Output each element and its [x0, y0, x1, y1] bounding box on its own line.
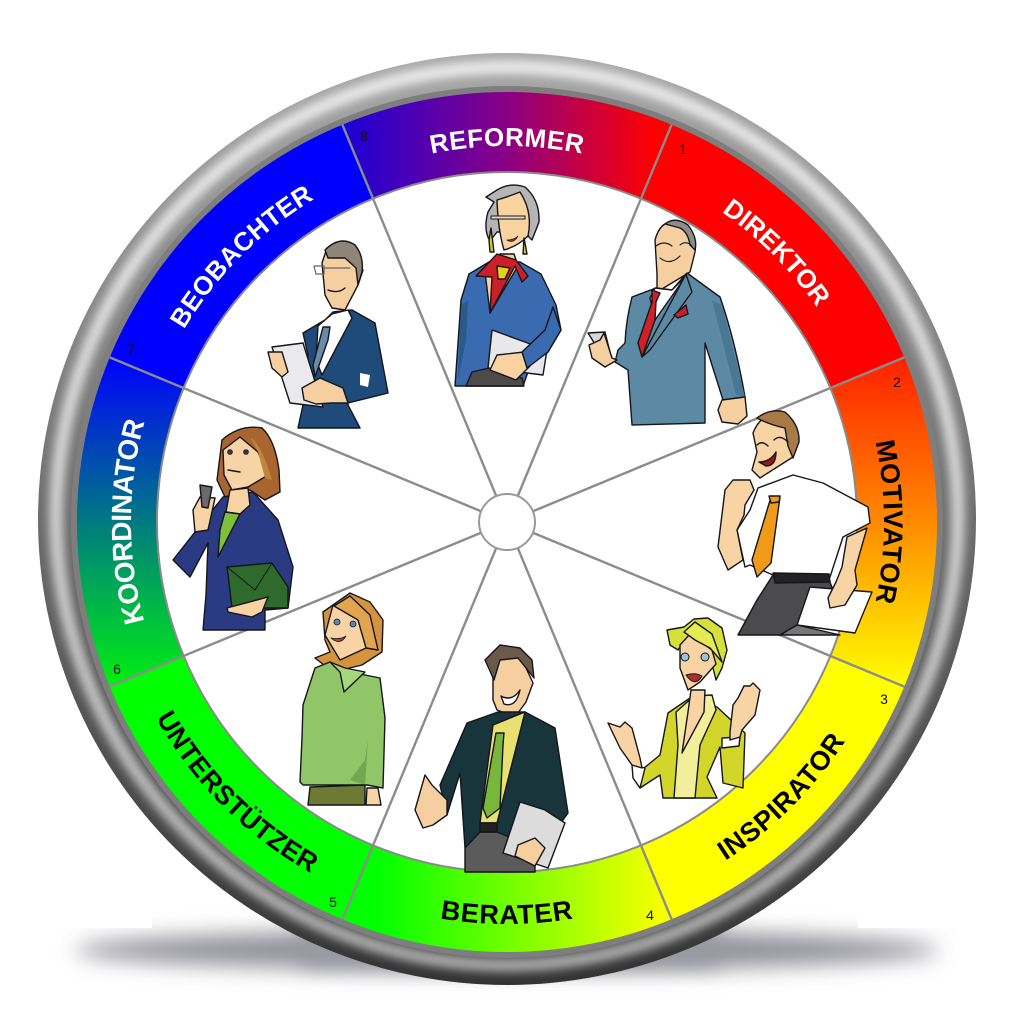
figure: Inspirator woman — [608, 618, 760, 798]
segment: Direktor — [641, 125, 904, 388]
segment numbers: 8 — [360, 128, 368, 144]
colored segments — [77, 92, 937, 952]
segment: Inspirator — [641, 656, 904, 919]
segment numbers: 6 — [113, 661, 121, 677]
segment numbers: 2 — [893, 374, 901, 390]
figure: Beobachter man — [268, 241, 388, 428]
label: KOORDINATOR: KOORDINATOR — [112, 420, 144, 624]
label: BEOBACHTER: BEOBACHTER — [170, 186, 314, 328]
figure: Unterstützer woman — [300, 593, 385, 805]
segment: Motivator — [830, 357, 937, 687]
label: BERATER: BERATER — [442, 900, 573, 924]
segment: Reformer — [342, 92, 672, 199]
label: DIREKTOR: DIREKTOR — [723, 198, 828, 307]
spokes — [110, 125, 904, 919]
label: UNTERSTÜTZER: UNTERSTÜTZER — [159, 710, 317, 873]
figure: Koordinator woman — [173, 427, 293, 630]
center hub — [479, 494, 535, 550]
segment numbers: 4 — [646, 907, 654, 923]
segment: Koordinator — [77, 357, 184, 687]
segment: Berater — [342, 845, 672, 952]
label: REFORMER: REFORMER — [430, 128, 583, 154]
figure: Berater man — [415, 645, 568, 872]
figure: Direktor man — [588, 220, 747, 425]
figure: Reformer woman — [455, 185, 561, 386]
segment numbers — [113, 128, 901, 923]
inner white disc — [157, 172, 857, 872]
ground shadow — [75, 925, 939, 970]
figure: Motivator man — [718, 411, 872, 635]
segment numbers: 1 — [679, 141, 687, 157]
segment numbers: 3 — [880, 691, 888, 707]
segment numbers: 7 — [127, 341, 135, 357]
segment: Unterstützer — [110, 656, 373, 919]
segment numbers: 5 — [329, 894, 337, 910]
labels — [112, 128, 903, 924]
segment: Beobachter — [110, 125, 373, 388]
label: MOTIVATOR: MOTIVATOR — [876, 440, 903, 603]
label: INSPIRATOR: INSPIRATOR — [716, 734, 845, 860]
